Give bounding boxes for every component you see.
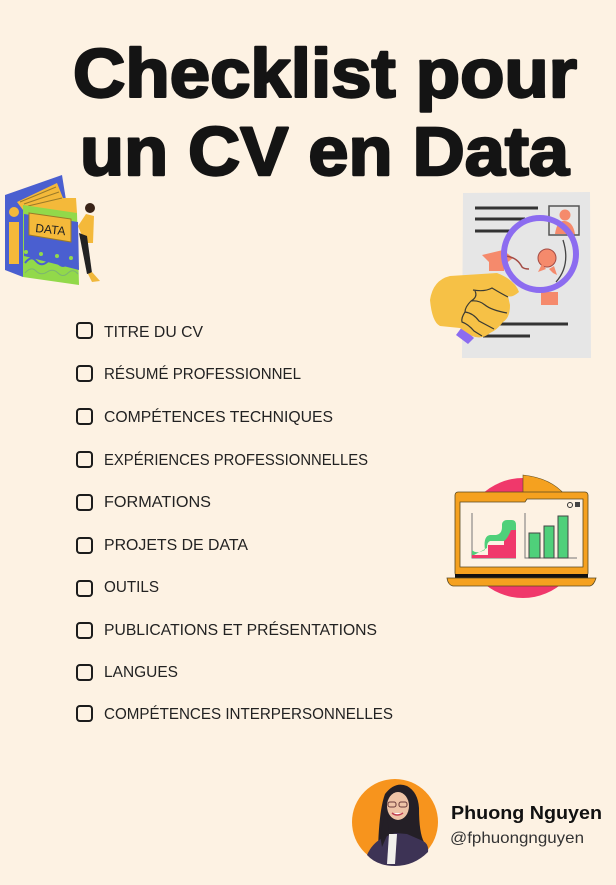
checklist item 7: OUTILS [104,579,159,596]
title: Checklist pour [73,35,577,112]
icon: CV under magnifying glass [430,192,591,358]
checklist item 10: COMPÉTENCES INTERPERSONNELLES [104,704,393,723]
checklist item 8: PUBLICATIONS ET PRÉSENTATIONS [104,620,377,639]
portrait [352,779,438,866]
checklist item 9: LANGUES [104,664,178,681]
checklist [77,323,393,723]
checklist item 2: RÉSUMÉ PROFESSIONNEL [104,364,301,383]
author name: Phuong Nguyen [451,803,602,823]
author handle: @fphuongnguyen [450,830,584,847]
title [73,35,577,190]
checklist item 7 [77,579,159,596]
checklist item 6: PROJETS DE DATA [104,537,248,554]
icon: data book with person: DATA [35,221,66,238]
checklist item 3: COMPÉTENCES TECHNIQUES [104,407,333,426]
checklist item 4: EXPÉRIENCES PROFESSIONNELLES [104,450,368,469]
icon: data book with person [5,175,100,285]
checklist item 5: FORMATIONS [104,494,211,511]
title: un CV en Data [80,113,570,190]
checklist item 1: TITRE DU CV [104,324,203,341]
icon: laptop with charts [447,475,596,598]
